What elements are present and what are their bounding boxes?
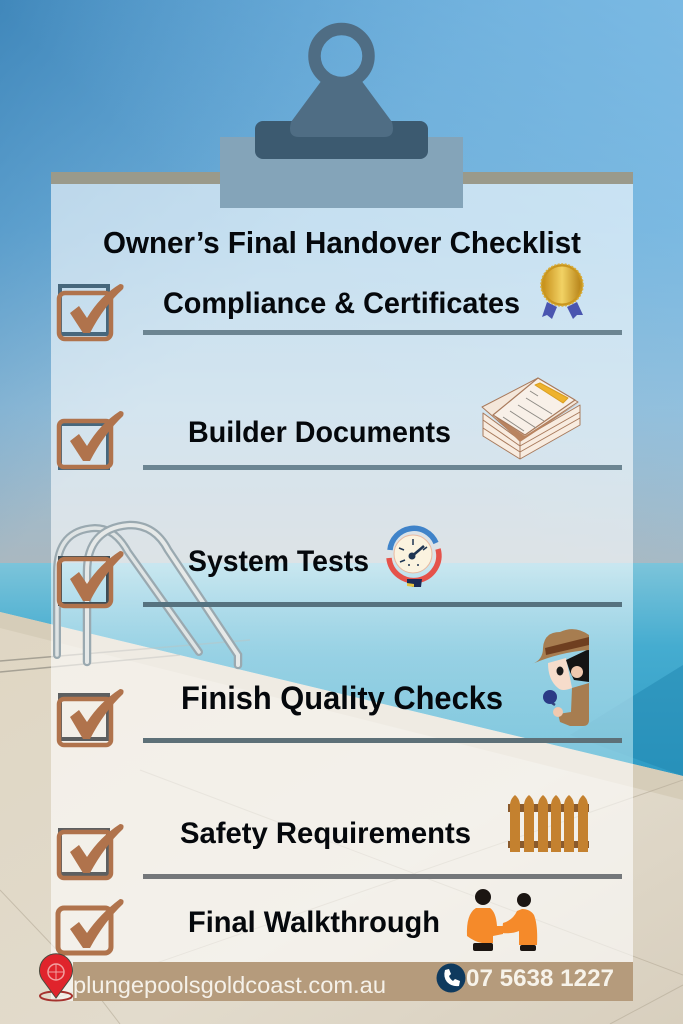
- icon: checkbox 1: [59, 284, 124, 339]
- heading: finish quality checks: Finish Quality Checks: [181, 680, 503, 716]
- panel: clipboard sheet: [51, 172, 633, 1001]
- divider 5: [143, 874, 622, 879]
- icon: wooden fence: [508, 795, 589, 852]
- heading: builder documents: Builder Documents: [188, 416, 451, 449]
- row: compliance and certificates: [59, 264, 622, 339]
- divider 2: [143, 465, 622, 470]
- icon: gold medal: [541, 264, 583, 319]
- icon: checkbox 4: [59, 689, 124, 745]
- icon: two workers shaking hands: [467, 889, 537, 951]
- phone number: 07 5638 1227: [466, 965, 614, 992]
- row: safety requirements: [59, 795, 622, 879]
- icon: pool ladder: [57, 525, 238, 665]
- website url: plungepoolsgoldcoast.com.au: [73, 972, 386, 998]
- divider 1: [143, 330, 622, 335]
- icon: location pin: [40, 954, 72, 1000]
- row: system tests: [59, 528, 622, 607]
- footer bar: [40, 954, 633, 1001]
- clipboard top edge: [51, 172, 633, 184]
- icon: clipboard clip: [220, 29, 463, 208]
- heading: safety requirements: Safety Requirements: [180, 817, 471, 850]
- icon: pressure gauge: [389, 528, 439, 587]
- icon: checkbox 6: [58, 899, 124, 953]
- divider 4: [143, 738, 622, 743]
- row: finish quality checks: [59, 629, 622, 745]
- icon: document stack: [482, 378, 580, 459]
- heading: system tests: System Tests: [188, 545, 369, 578]
- icon: detective: [532, 629, 589, 726]
- divider 3: [143, 602, 622, 607]
- icon: checkbox 5: [59, 824, 124, 878]
- icon: checkbox 3: [59, 551, 124, 606]
- row: builder documents: [59, 378, 622, 470]
- icon: checkbox 2: [59, 411, 124, 468]
- title: Owner’s Final Handover Checklist: [103, 225, 581, 260]
- heading: final walkthrough: Final Walkthrough: [188, 906, 440, 939]
- heading: compliance: Compliance & Certificates: [163, 287, 520, 320]
- water tint through sheet: [51, 560, 633, 764]
- icon: phone: [436, 964, 466, 992]
- row: final walkthrough: [58, 889, 537, 953]
